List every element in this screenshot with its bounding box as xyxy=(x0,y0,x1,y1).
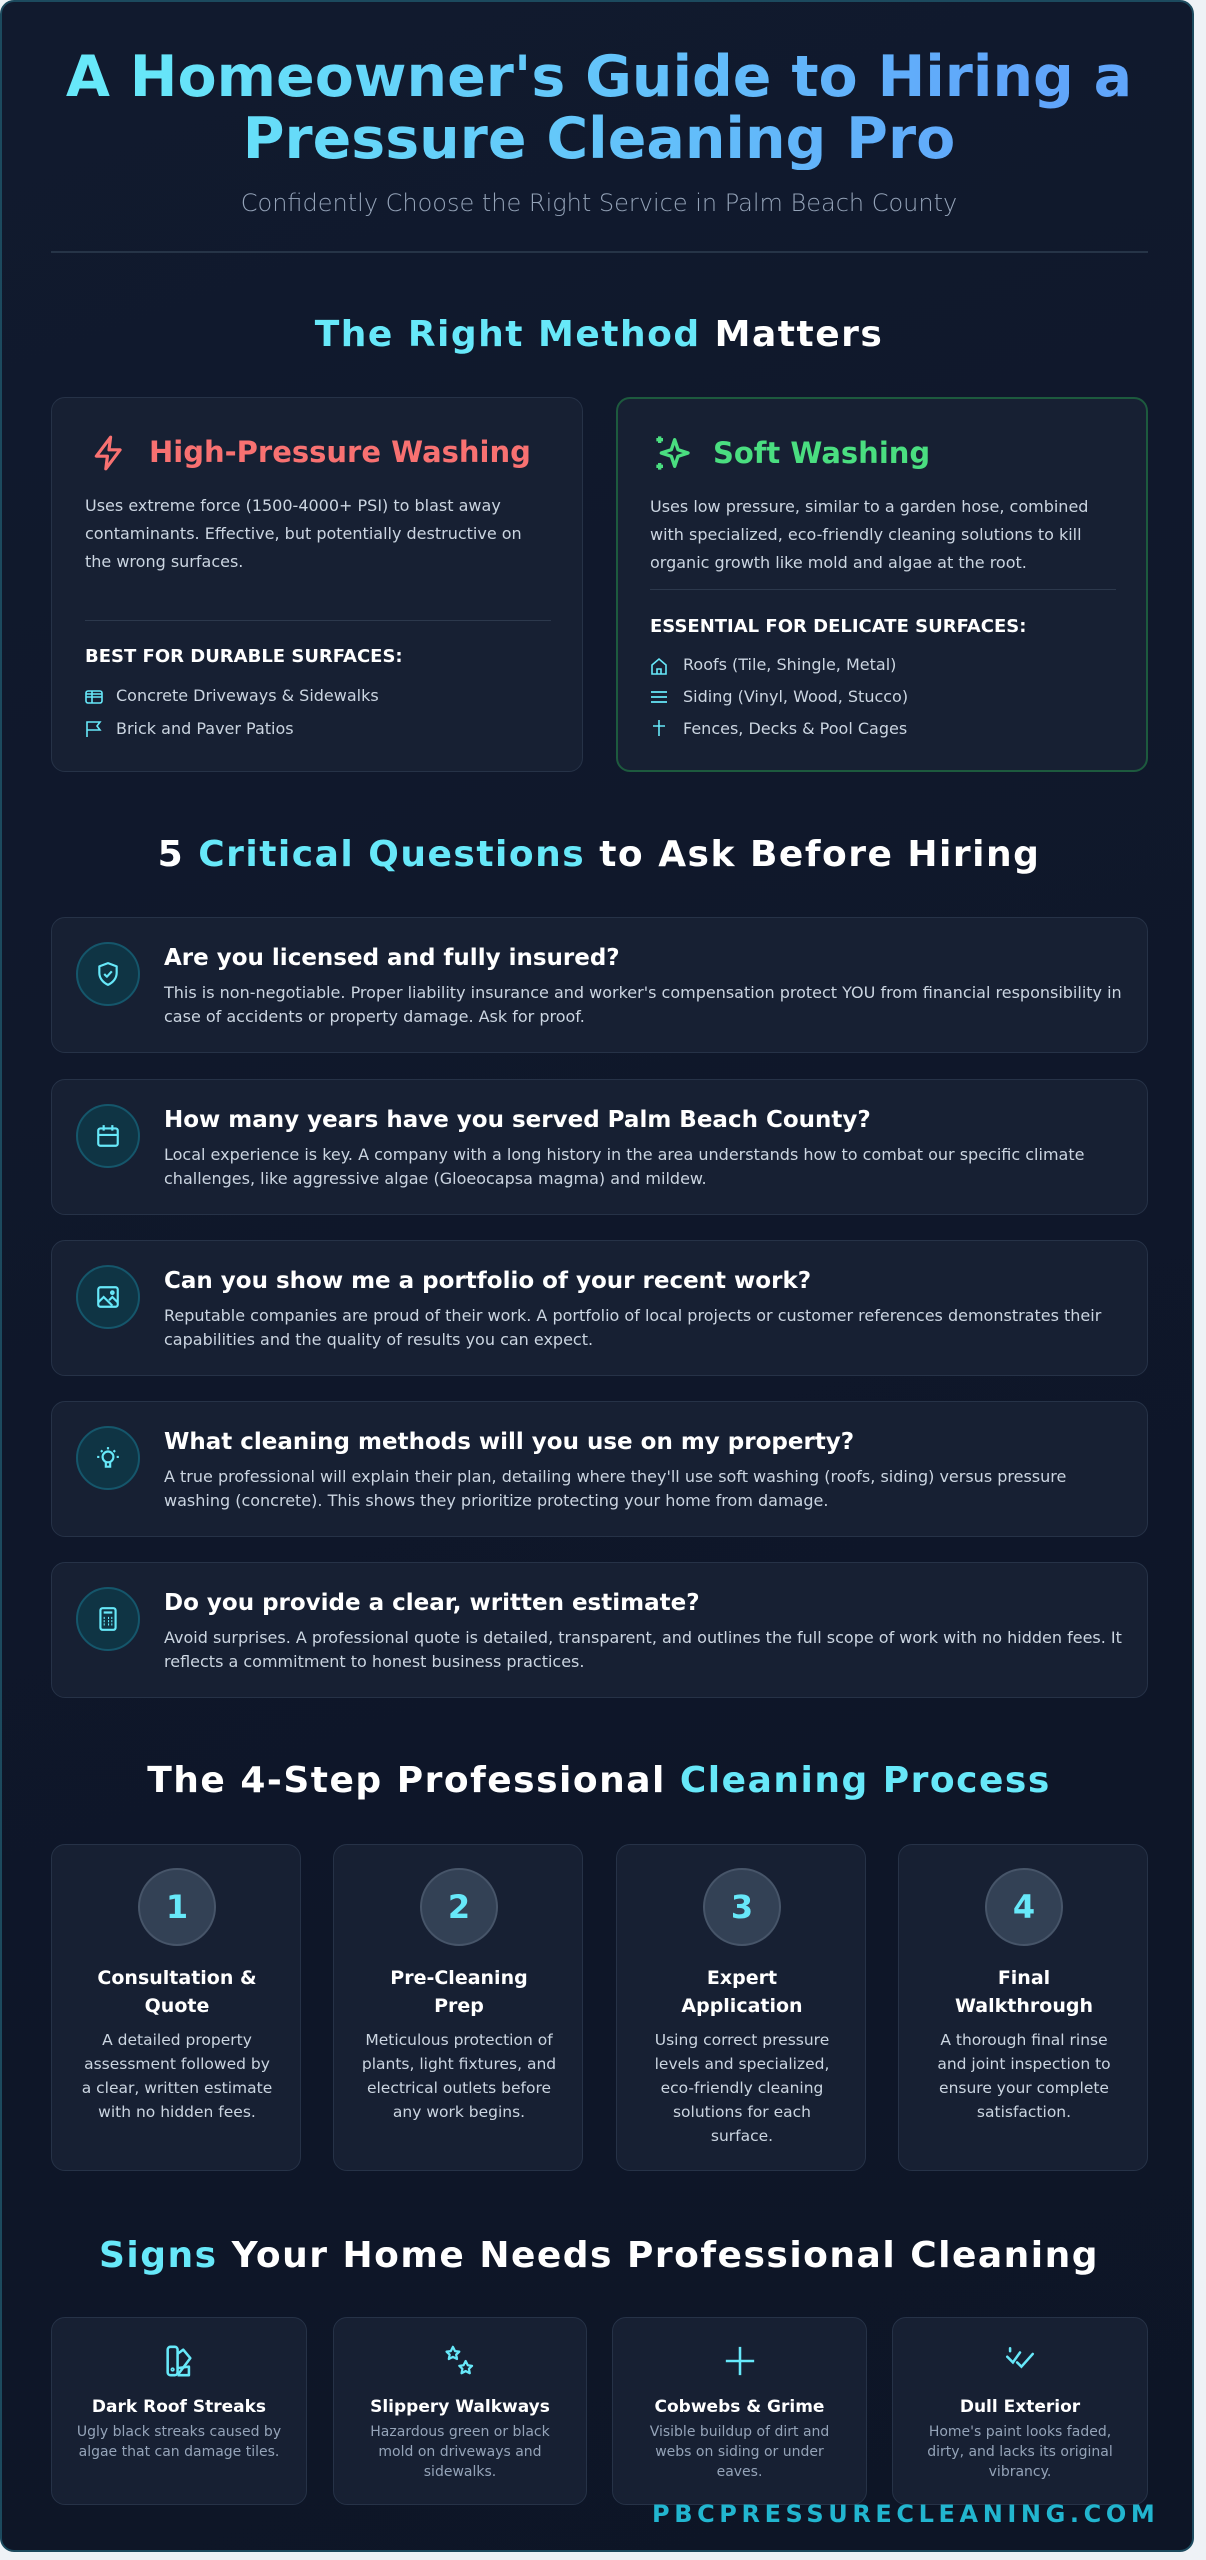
icon: swatches xyxy=(166,2346,192,2376)
heading: soft washing: Soft Washing xyxy=(713,436,930,470)
step body: A thorough final rinse and joint inspection to ensure your complete satisfaction. xyxy=(937,2031,1111,2121)
step number: 2 xyxy=(448,1888,470,1926)
icon: sparkles xyxy=(656,436,690,470)
step number: 3 xyxy=(731,1888,753,1926)
question title: Are you licensed and fully insured? xyxy=(164,945,620,971)
sign title: Dark Roof Streaks xyxy=(92,2397,266,2417)
question body: Avoid surprises. A professional quote is detailed, transparent, and outlines the full scope of work with no hidden fees. It reflects a commitment to honest business practices. xyxy=(164,1628,1122,1671)
sign title: Cobwebs & Grime xyxy=(655,2397,824,2417)
text: description: Uses low pressure, similar to a garden hose, combined with specialized, eco-friendly cleaning solutions to kill organic growth like mold and algae at the root. xyxy=(650,497,1088,572)
heading: signs: Signs Your Home Needs Professional Cleaning xyxy=(99,2235,1099,2276)
step number xyxy=(985,1868,1063,1946)
step 3 xyxy=(616,1844,866,2171)
sign body: Home's paint looks faded, dirty, and lacks its original vibrancy. xyxy=(927,2424,1113,2480)
icon: shield xyxy=(76,942,140,1006)
question card 5 xyxy=(51,1562,1148,1698)
question body: This is non-negotiable. Proper liability insurance and worker's compensation protect YOU from financial responsibility in case of accidents or property damage. Ask for proof. xyxy=(164,983,1122,1026)
step 1 xyxy=(51,1844,301,2171)
step title: Consultation & xyxy=(97,1967,257,1989)
step 4 xyxy=(898,1844,1148,2171)
icon: stars xyxy=(445,2346,474,2374)
step number xyxy=(420,1868,498,1946)
list: durable surfaces: Concrete Driveways & Sidewalks xyxy=(116,686,379,705)
panel: soft washing xyxy=(616,397,1148,772)
footer: website: PBCPRESSURECLEANING.COM xyxy=(652,2500,1159,2528)
step title: Prep xyxy=(434,1995,484,2017)
list: delicate surfaces: Fences, Decks & Pool Cages xyxy=(683,719,907,738)
text: description: Uses extreme force (1500-4000+ PSI) to blast away contaminants. Effective, but potentially destructive on the wrong surfaces. xyxy=(85,496,522,571)
sign card: cobwebs xyxy=(612,2317,867,2505)
step title xyxy=(390,1967,528,2017)
question title: Do you provide a clear, written estimate? xyxy=(164,1590,700,1616)
step number xyxy=(703,1868,781,1946)
icon: calculator xyxy=(76,1587,140,1651)
list: delicate surfaces: Roofs (Tile, Shingle, Metal) xyxy=(683,655,896,674)
icon: image xyxy=(76,1265,140,1329)
heading: the right method matters: The Right Method Matters xyxy=(315,314,883,355)
step body: A detailed property assessment followed by a clear, written estimate with no hidden fees. xyxy=(82,2031,272,2121)
icon: calendar xyxy=(76,1104,140,1168)
list: delicate surfaces: Siding (Vinyl, Wood, Stucco) xyxy=(683,687,908,706)
heading: 4-step process: The 4-Step Professional Cleaning Process xyxy=(147,1760,1051,1801)
step title: Application xyxy=(681,1995,803,2017)
step title xyxy=(681,1967,803,2017)
question card 4 xyxy=(51,1401,1148,1537)
step title: Expert xyxy=(707,1967,777,1989)
question body: Reputable companies are proud of their work. A portfolio of local projects or customer references demonstrates their capabilities and the quality of results you can expect. xyxy=(164,1306,1101,1349)
question body: A true professional will explain their plan, detailing where they'll use soft washing (roofs, siding) versus pressure washing (concrete). This shows they prioritize protecting your home from damage. xyxy=(164,1467,1066,1510)
step title: Pre-Cleaning xyxy=(390,1967,528,1989)
step title xyxy=(97,1967,257,2017)
step body: Using correct pressure levels and specialized, eco-friendly cleaning solutions for each surface. xyxy=(655,2031,829,2145)
sign body: Ugly black streaks caused by algae that can damage tiles. xyxy=(77,2424,281,2460)
subtitle: Confidently Choose the Right Service in Palm Beach County xyxy=(241,189,957,217)
question body: Local experience is key. A company with a long history in the area understands how to combat our specific climate challenges, like aggressive algae (Gloeocapsa magma) and mildew. xyxy=(164,1145,1084,1188)
list: durable surfaces: Brick and Paver Patios xyxy=(116,719,294,738)
icon: lightning xyxy=(94,436,122,470)
icon: checks xyxy=(1006,2347,1034,2368)
question card 2 xyxy=(51,1079,1148,1215)
step number: 4 xyxy=(1013,1888,1035,1926)
step title xyxy=(955,1967,1093,2017)
sign card: dark roof streaks xyxy=(51,2317,307,2505)
heading: 5 critical questions: 5 Critical Questions to Ask Before Hiring xyxy=(158,834,1040,875)
question title: How many years have you served Palm Beach County? xyxy=(164,1107,871,1133)
step 2 xyxy=(333,1844,583,2171)
sign title: Dull Exterior xyxy=(960,2397,1080,2417)
question title: What cleaning methods will you use on my property? xyxy=(164,1429,854,1455)
title xyxy=(2,46,1196,170)
sign card: slippery walkways xyxy=(333,2317,587,2505)
step title: Final xyxy=(998,1967,1050,1989)
sign body: Visible buildup of dirt and webs on siding or under eaves. xyxy=(650,2424,829,2480)
heading: high-pressure washing: High-Pressure Washing xyxy=(149,435,531,469)
sign title: Slippery Walkways xyxy=(370,2397,550,2417)
question title: Can you show me a portfolio of your recent work? xyxy=(164,1268,811,1294)
sign card: dull exterior xyxy=(892,2317,1148,2505)
sign body: Hazardous green or black mold on driveways and sidewalks. xyxy=(370,2424,550,2480)
panel: high-pressure washing xyxy=(51,397,583,772)
step number: 1 xyxy=(166,1888,188,1926)
subheading: essential for delicate surfaces: ESSENTIAL FOR DELICATE SURFACES: xyxy=(650,616,1026,637)
title: Pressure Cleaning Pro xyxy=(243,106,955,172)
icon: plus xyxy=(726,2346,754,2376)
icon: lightbulb xyxy=(76,1426,140,1490)
title: A Homeowner's Guide to Hiring a xyxy=(66,44,1132,110)
step number xyxy=(138,1868,216,1946)
subheading: best for durable surfaces: BEST FOR DURABLE SURFACES: xyxy=(85,646,403,667)
question card 1 xyxy=(51,917,1148,1053)
list: delicate surfaces xyxy=(651,655,908,738)
question card 3 xyxy=(51,1240,1148,1376)
step title: Walkthrough xyxy=(955,1995,1093,2017)
list: durable surfaces xyxy=(85,686,379,738)
step title: Quote xyxy=(145,1995,209,2017)
step body: Meticulous protection of plants, light fixtures, and electrical outlets before any work begins. xyxy=(362,2031,556,2121)
